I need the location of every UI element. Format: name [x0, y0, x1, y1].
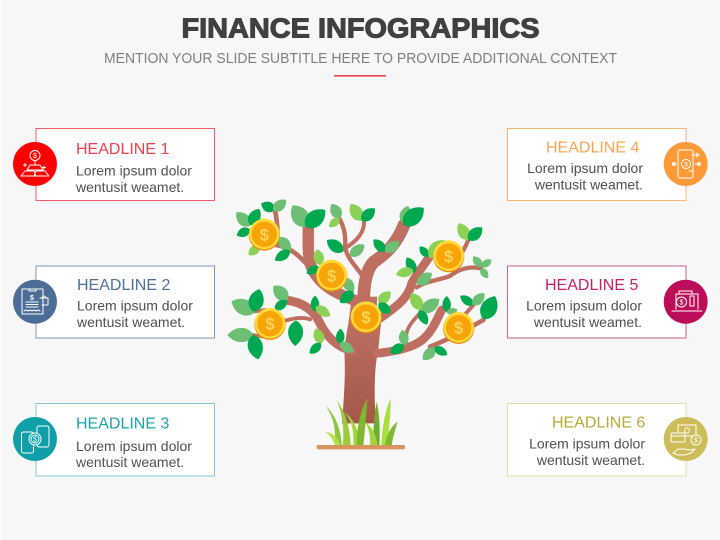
leaves [227, 196, 502, 364]
coin [433, 240, 464, 272]
body text: Lorem ipsum dolor [76, 438, 192, 454]
body text: wentusit weamet. [76, 314, 185, 330]
panel: headline 5 [508, 266, 708, 338]
icon: receipt: $ [30, 295, 34, 302]
body text: Lorem ipsum dolor [76, 162, 192, 178]
ground [317, 445, 405, 449]
body text: wentusit weamet. [533, 314, 642, 330]
icon: cash and card in hand [664, 417, 708, 461]
panel: headline 1 [13, 128, 214, 200]
coin [443, 312, 474, 344]
icon: phones transfer: $ [33, 436, 37, 444]
icon: mobile payment: $ [684, 162, 688, 168]
coin [249, 219, 280, 251]
icon: gold bars and coin: $ [33, 153, 37, 160]
body text: Lorem ipsum dolor [527, 160, 643, 176]
grass [325, 398, 398, 446]
icon: laptop payment [664, 280, 708, 324]
coin: $ [265, 315, 275, 334]
headline text: HEADLINE 5 [545, 277, 638, 294]
body text: wentusit weamet. [534, 176, 643, 192]
panel: headline 6 [508, 404, 708, 476]
headline text: HEADLINE 3 [76, 416, 169, 432]
panel: headline 4 [508, 128, 708, 200]
tree trunk and branches [253, 210, 483, 423]
icon: phones transfer [13, 417, 57, 461]
subtitle: MENTION YOUR SLIDE SUBTITLE HERE TO PROVIDE ADDITIONAL CONTEXT [104, 51, 617, 67]
coin [350, 301, 382, 333]
headline text: HEADLINE 2 [77, 277, 170, 294]
icon: gold bars and coin [13, 142, 57, 186]
coin [254, 308, 286, 340]
body text: Lorem ipsum dolor [529, 436, 645, 452]
headline text: HEADLINE 4 [546, 140, 639, 156]
icon: receipt [13, 280, 57, 324]
coin [316, 260, 347, 292]
coin: $ [444, 247, 454, 266]
icon: laptop payment: $ [680, 300, 684, 306]
illustration: money tree [227, 196, 502, 449]
headline text: HEADLINE 1 [76, 141, 169, 158]
panel: headline 2 [13, 266, 214, 338]
body text: wentusit weamet. [75, 454, 184, 470]
body text: Lorem ipsum dolor [526, 298, 642, 314]
panel: headline 3 [13, 404, 214, 476]
title: FINANCE INFOGRAPHICS [182, 12, 540, 44]
coin: $ [260, 225, 270, 244]
coin: $ [361, 308, 371, 327]
title underline [334, 75, 386, 77]
coin: $ [454, 319, 464, 338]
body text: Lorem ipsum dolor [77, 298, 193, 314]
coin: $ [327, 266, 337, 285]
icon: mobile payment [664, 142, 708, 186]
icon: cash and card in hand: $ [694, 438, 698, 444]
body text: wentusit weamet. [536, 452, 645, 468]
body text: wentusit weamet. [75, 179, 184, 195]
headline text: HEADLINE 6 [552, 414, 645, 432]
